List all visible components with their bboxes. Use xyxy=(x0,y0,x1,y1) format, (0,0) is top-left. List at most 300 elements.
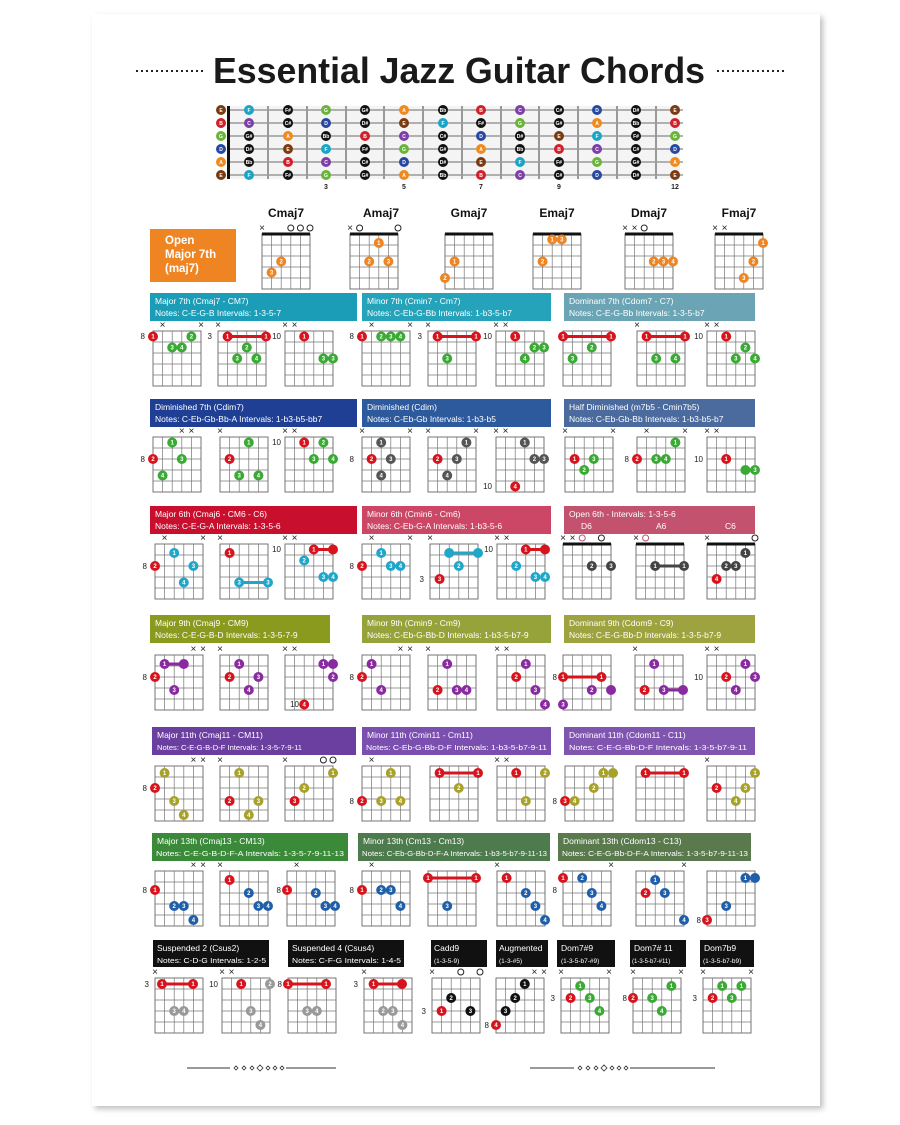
chords row 3: × xyxy=(292,533,298,544)
chords row 4: 1 xyxy=(744,662,748,668)
chords row 5: 1 xyxy=(644,771,648,777)
chords row 5: 1 xyxy=(331,771,335,777)
open maj7 chords: 4 xyxy=(671,260,675,266)
chords row 1: 3 xyxy=(171,346,175,352)
chords row 6: 8 xyxy=(350,886,355,895)
section headers row 7: (1-3-5-9) xyxy=(434,958,459,965)
fretboard note chart: F xyxy=(595,134,599,140)
fretboard note chart: G# xyxy=(362,108,369,114)
chords row 2: 1 xyxy=(465,440,469,446)
chords row 4: 1 xyxy=(446,662,450,668)
fretboard note chart: G xyxy=(673,134,677,140)
chords row 1: 3 xyxy=(236,356,240,362)
chords row 2: 3 xyxy=(389,457,393,463)
chords row 4: 1 xyxy=(163,662,167,668)
chords row 5: 3 xyxy=(380,799,384,805)
chords row 1: 2 xyxy=(245,346,249,352)
chords row 7: 4 xyxy=(401,1023,405,1029)
chords row 6: 8 xyxy=(143,886,148,895)
chords row 4: × xyxy=(714,644,720,655)
chords row 1: 4 xyxy=(523,356,527,362)
chords row 6: × xyxy=(681,860,687,871)
section headers row 7: Dom7#9 xyxy=(561,943,593,953)
section headers row 2 xyxy=(150,399,755,427)
chords row 3: 1 xyxy=(524,548,528,554)
chords row 6: 1 xyxy=(360,888,364,894)
chords row 6: × xyxy=(494,860,500,871)
fretboard note chart: E xyxy=(673,108,677,114)
fretboard note chart: A xyxy=(479,147,483,153)
section headers row 3 xyxy=(150,506,755,534)
open maj7 chords: Cmaj7 xyxy=(268,206,304,220)
fretboard note chart: D xyxy=(595,173,599,179)
fretboard note chart: F xyxy=(441,121,445,127)
chords row 6: 4 xyxy=(682,918,686,924)
section headers row 4: Notes: C-Eb-G-Bb-D Intervals: 1-b3-5-b7-9 xyxy=(367,630,529,640)
chords row 7: 1 xyxy=(286,982,290,988)
chords row 7: 3 xyxy=(422,1007,427,1016)
open maj7 chords: 2 xyxy=(541,260,545,266)
section headers row 4: Minor 9th (Cmin9 - Cm9) xyxy=(367,618,461,628)
chords row 2: 3 xyxy=(455,457,459,463)
chords row 1: 2 xyxy=(533,346,537,352)
fretboard note chart: A xyxy=(286,134,290,140)
open maj7 chords: × xyxy=(622,223,628,234)
fretboard note chart: C xyxy=(595,147,599,153)
chords row 3: 2 xyxy=(153,564,157,570)
fretboard note chart: D xyxy=(479,134,483,140)
chords row 4: × xyxy=(425,644,431,655)
chords row 4: 1 xyxy=(238,662,242,668)
fretboard note chart: D xyxy=(402,160,406,166)
chords row 7: 3 xyxy=(173,1009,177,1015)
chords row 3: × xyxy=(282,533,288,544)
section headers row 6: Major 13th (Cmaj13 - CM13) xyxy=(157,836,265,846)
section headers row 5 xyxy=(152,727,755,755)
chords row 6: 3 xyxy=(725,904,729,910)
chords row 3: 2 xyxy=(457,564,461,570)
chords row 7: 3 xyxy=(306,1009,310,1015)
chords row 7: 2 xyxy=(382,1009,386,1015)
chords row 6: 3 xyxy=(590,891,594,897)
section headers row 3: Open 6th - Intervals: 1-3-5-6 xyxy=(569,509,676,519)
chords row 1: 1 xyxy=(725,334,729,340)
chords row 5: 8 xyxy=(350,797,355,806)
chords row 2: × xyxy=(217,426,223,437)
open maj7 chords: × xyxy=(722,223,728,234)
chords row 7: × xyxy=(558,967,564,978)
section headers row 7: Suspended 2 (Csus2) xyxy=(157,943,239,953)
section headers row 7: Augmented xyxy=(499,943,543,953)
section headers row 4: Notes: C-E-G-B-D Intervals: 1-3-5-7-9 xyxy=(155,630,298,640)
chords row 6: × xyxy=(190,860,196,871)
chords row 7: 2 xyxy=(711,996,715,1002)
chords row 4: 2 xyxy=(436,688,440,694)
chords row 4: 3 xyxy=(561,702,565,708)
open maj7 chords: 1 xyxy=(761,241,765,247)
chords row 4: × xyxy=(632,644,638,655)
chords row 4: 8 xyxy=(350,673,355,682)
fretboard note chart: G xyxy=(518,121,522,127)
chords row 6: × xyxy=(217,860,223,871)
chords row 7: × xyxy=(361,967,367,978)
chords row 1: 3 xyxy=(418,332,423,341)
open maj7 chords: 2 xyxy=(368,260,372,266)
fretboard note chart: G xyxy=(324,173,328,179)
chords row 7: 3 xyxy=(693,994,698,1003)
chords row 1: 1 xyxy=(360,334,364,340)
chords row 3: × xyxy=(217,533,223,544)
chords row 7: 2 xyxy=(631,996,635,1002)
chords row 7: 8 xyxy=(278,980,283,989)
section headers row 5: Notes: C-E-G-Bb-D-F Intervals: 1-3-5-b7-9-11 xyxy=(569,743,747,752)
chords row 2: × xyxy=(188,426,194,437)
chords row 7: 1 xyxy=(160,982,164,988)
fretboard note chart: 7 xyxy=(479,184,483,191)
chords row 7 xyxy=(145,967,754,1033)
fretboard note chart: G# xyxy=(246,134,253,140)
chords row 7: 3 xyxy=(469,1009,473,1015)
fretboard note chart: A xyxy=(595,121,599,127)
fretboard note chart: D xyxy=(324,121,328,127)
chords row 3: 8 xyxy=(350,562,355,571)
fretboard note chart: G xyxy=(219,134,223,140)
chords row 6: 4 xyxy=(192,918,196,924)
chords row 2: 4 xyxy=(257,474,261,480)
chords row 3: 2 xyxy=(725,564,729,570)
chords row 3: 4 xyxy=(715,577,719,583)
chords row 5: 2 xyxy=(153,786,157,792)
chords row 2: 10 xyxy=(694,455,704,464)
section headers row 3: Notes: C-E-G-A Intervals: 1-3-5-6 xyxy=(155,521,281,531)
open maj7 chords: Emaj7 xyxy=(539,206,575,220)
label: Open Major 7th xyxy=(150,229,236,282)
chords row 6: 2 xyxy=(644,891,648,897)
chords row 1: 1 xyxy=(226,334,230,340)
chords row 4: 8 xyxy=(553,673,558,682)
chords row 2: × xyxy=(704,426,710,437)
chords row 6: 4 xyxy=(399,904,403,910)
chords row 4: 4 xyxy=(380,688,384,694)
chords row 1: 4 xyxy=(399,334,403,340)
chords row 2: 3 xyxy=(655,457,659,463)
chords row 4: 2 xyxy=(331,675,335,681)
chords row 4: 3 xyxy=(257,675,261,681)
chords row 7: × xyxy=(429,967,435,978)
open maj7 chords: 2 xyxy=(652,260,656,266)
chords row 2: 3 xyxy=(312,457,316,463)
chords row 4: 3 xyxy=(753,675,757,681)
chords row 4: × xyxy=(704,644,710,655)
section headers row 7: (1-3-5-b7-b9) xyxy=(703,958,741,965)
chords row 2 xyxy=(141,426,760,492)
open maj7 chords: 3 xyxy=(560,238,564,244)
chords row 2: 8 xyxy=(350,455,355,464)
chords row 4: 4 xyxy=(303,702,307,708)
chords row 5: 2 xyxy=(543,771,547,777)
chords row 4: × xyxy=(217,644,223,655)
fretboard note chart: F# xyxy=(478,121,484,127)
chords row 5: 2 xyxy=(715,786,719,792)
chords row 3: 3 xyxy=(609,564,613,570)
open maj7 chords: × xyxy=(259,223,265,234)
open maj7 chords: 1 xyxy=(453,260,457,266)
fretboard note chart: F xyxy=(247,108,251,114)
chords row 6: 4 xyxy=(333,904,337,910)
chords row 2: 1 xyxy=(303,440,307,446)
chords row 4: 1 xyxy=(524,662,528,668)
section headers row 7: Notes: C-D-G Intervals: 1-2-5 xyxy=(157,956,266,965)
fretboard note chart: D# xyxy=(633,173,639,179)
section headers row 1: Major 7th (Cmaj7 - CM7) xyxy=(155,296,249,306)
fretboard note chart: 9 xyxy=(557,184,561,191)
chords row 4: 4 xyxy=(465,688,469,694)
open maj7 chords: × xyxy=(347,223,353,234)
chords row 6: 3 xyxy=(257,904,261,910)
chords row 6: 2 xyxy=(247,891,251,897)
fretboard note chart: B xyxy=(479,108,483,114)
fretboard note chart: F# xyxy=(362,147,368,153)
chords row 1: × xyxy=(407,320,413,331)
section headers row 4: Major 9th (Cmaj9 - CM9) xyxy=(155,618,249,628)
chords row 1: 3 xyxy=(571,356,575,362)
open maj7 chords: 2 xyxy=(443,276,447,282)
section headers row 2: Notes: C-Eb-Gb-Bb-A Intervals: 1-b3-b5-bb7 xyxy=(155,414,323,424)
chords row 4: 1 xyxy=(600,675,604,681)
chords row 7: × xyxy=(606,967,612,978)
fretboard note chart: F# xyxy=(285,108,291,114)
section headers row 7: (1-3-5-b7-#9) xyxy=(561,958,599,965)
chords row 3: 3 xyxy=(420,575,425,584)
chords row 4: 3 xyxy=(534,688,538,694)
section headers row 2: Half Diminished (m7b5 - Cmin7b5) xyxy=(569,402,700,412)
chords row 1: 2 xyxy=(190,334,194,340)
fretboard note chart: D xyxy=(219,147,223,153)
section headers row 3: Minor 6th (Cmin6 - Cm6) xyxy=(367,509,461,519)
chords row 4: 1 xyxy=(322,662,326,668)
chords row 3: 8 xyxy=(143,562,148,571)
chords row 6: 1 xyxy=(228,878,232,884)
section headers row 7: Dom7# 11 xyxy=(634,943,673,953)
section headers row 1: Notes: C-E-G-Bb Intervals: 1-3-5-b7 xyxy=(569,308,705,318)
section headers row 5: Major 11th (Cmaj11 - CM11) xyxy=(157,730,263,740)
chords row 2: × xyxy=(359,426,365,437)
chords row 3: 1 xyxy=(654,564,658,570)
section headers row 4 xyxy=(150,615,755,643)
chords row 3: × xyxy=(494,533,500,544)
chords row 4: × xyxy=(190,644,196,655)
chords row 2: × xyxy=(644,426,650,437)
chords row 2: × xyxy=(714,426,720,437)
chords row 7: 10 xyxy=(209,980,219,989)
chords row 6: 1 xyxy=(474,876,478,882)
fretboard note chart: F xyxy=(518,160,522,166)
chords row 2: × xyxy=(503,426,509,437)
chords row 1: 1 xyxy=(609,334,613,340)
chords row 5: 3 xyxy=(257,799,261,805)
fretboard note chart: Bb xyxy=(440,108,446,114)
chords row 2: × xyxy=(179,426,185,437)
chords row 6: 3 xyxy=(663,891,667,897)
chords row 3: 3 xyxy=(438,577,442,583)
open maj7 chords: 3 xyxy=(662,260,666,266)
chords row 7: 4 xyxy=(660,1009,664,1015)
fretboard note chart: B xyxy=(557,147,561,153)
chords row 5: 4 xyxy=(573,799,577,805)
chords row 2: 3 xyxy=(542,457,546,463)
chords row 7: 4 xyxy=(182,1009,186,1015)
fretboard note chart: Bb xyxy=(633,121,639,127)
chords row 6: 4 xyxy=(600,904,604,910)
chords row 1: 10 xyxy=(694,332,704,341)
chords row 4: × xyxy=(292,644,298,655)
fretboard note chart: Bb xyxy=(323,134,329,140)
chords row 5: × xyxy=(282,755,288,766)
chords row 1: 10 xyxy=(483,332,493,341)
chords row 6: 1 xyxy=(153,888,157,894)
chords row 5: × xyxy=(369,755,375,766)
chords row 2: × xyxy=(407,426,413,437)
chords row 2: 3 xyxy=(180,457,184,463)
chords row 7: × xyxy=(630,967,636,978)
chords row 4: 2 xyxy=(228,675,232,681)
chords row 3: × xyxy=(427,533,433,544)
chords row 1: × xyxy=(215,320,221,331)
chords row 3: 2 xyxy=(360,564,364,570)
chords row 3: 1 xyxy=(173,551,177,557)
chords row 2: × xyxy=(282,426,288,437)
chords row 2: 2 xyxy=(151,457,155,463)
fretboard note chart: G xyxy=(324,108,328,114)
chords row 7: 4 xyxy=(259,1023,263,1029)
chords row 4: × xyxy=(200,644,206,655)
fretboard note chart: E xyxy=(402,121,406,127)
section headers row 3: D6 xyxy=(581,521,592,531)
chords row 7: 1 xyxy=(740,984,744,990)
section headers row 3: Notes: C-Eb-G-A Intervals: 1-b3-5-6 xyxy=(367,521,502,531)
chords row 6: 1 xyxy=(744,876,748,882)
chords row 1: × xyxy=(292,320,298,331)
chords row 1: × xyxy=(634,320,640,331)
chords row 1: 8 xyxy=(350,332,355,341)
chords row 7: 8 xyxy=(485,1021,490,1030)
chords row 3: 10 xyxy=(272,545,282,554)
chords row 7: 3 xyxy=(391,1009,395,1015)
chords row 4: 2 xyxy=(725,675,729,681)
chords row 1: × xyxy=(369,320,375,331)
chords row 5: 1 xyxy=(753,771,757,777)
chords row 1: × xyxy=(198,320,204,331)
section headers row 5: Minor 11th (Cmin11 - Cm11) xyxy=(367,730,473,740)
chords row 7: 1 xyxy=(372,982,376,988)
section headers row 2: Diminished 7th (Cdim7) xyxy=(155,402,244,412)
chords row 7: × xyxy=(541,967,547,978)
chords row 3: 4 xyxy=(543,575,547,581)
chords row 5: 2 xyxy=(592,786,596,792)
chords row 4: 10 xyxy=(694,673,704,682)
section headers row 6: Notes: C-Eb-G-Bb-D-F-A Intervals: 1-b3-5-b7-9-11-13 xyxy=(362,849,547,858)
fretboard note chart: B xyxy=(479,173,483,179)
chords row 4: 8 xyxy=(143,673,148,682)
fretboard note chart: A xyxy=(402,173,406,179)
chords row 3: × xyxy=(560,533,566,544)
chords row 2: 2 xyxy=(228,457,232,463)
section headers row 7: (1-3-5-b7-#11) xyxy=(632,959,670,965)
open maj7 chords: Fmaj7 xyxy=(722,206,757,220)
fretboard note chart: C xyxy=(518,173,522,179)
chords row 1: 1 xyxy=(303,334,307,340)
chords row 1: 4 xyxy=(753,356,757,362)
chords row 6 xyxy=(143,860,760,926)
chords row 2: 1 xyxy=(171,440,175,446)
open maj7 chords: 3 xyxy=(270,270,274,276)
chords row 4: 1 xyxy=(653,662,657,668)
chords row 2: 2 xyxy=(533,457,537,463)
chords row 3: 3 xyxy=(238,580,242,586)
fretboard note chart: A xyxy=(219,160,223,166)
chords row 2: × xyxy=(493,426,499,437)
fretboard note chart: F# xyxy=(285,173,291,179)
chords row 3: 2 xyxy=(515,564,519,570)
chords row 2: 2 xyxy=(370,457,374,463)
title: Essential Jazz Guitar Chords xyxy=(213,50,705,91)
chords row 6: 3 xyxy=(705,918,709,924)
section headers row 7 xyxy=(153,940,754,967)
fretboard note chart xyxy=(216,105,683,191)
chords row 7: 1 xyxy=(191,982,195,988)
chords row 5: 8 xyxy=(143,784,148,793)
chords row 1: 1 xyxy=(151,334,155,340)
section headers row 6: Minor 13th (Cm13 - Cm13) xyxy=(363,836,464,846)
chords row 5: 1 xyxy=(389,771,393,777)
chords row 2: × xyxy=(562,426,568,437)
chords row 1: 3 xyxy=(446,356,450,362)
chords row 4: × xyxy=(282,644,288,655)
chords row 4: 2 xyxy=(153,675,157,681)
fretboard note chart: 12 xyxy=(671,184,679,191)
section headers row 6: Notes: C-E-G-Bb-D-F-A Intervals: 1-3-5-b7-9-11-13 xyxy=(562,849,748,858)
chords row 3: × xyxy=(200,533,206,544)
chords row 2: × xyxy=(292,426,298,437)
chords row 5: 3 xyxy=(744,786,748,792)
chords row 4: × xyxy=(397,644,403,655)
chords row 7: 4 xyxy=(315,1009,319,1015)
chords row 7: 3 xyxy=(651,996,655,1002)
chords row 4: 2 xyxy=(360,675,364,681)
chords row 7: 3 xyxy=(504,1009,508,1015)
chords row 1: 3 xyxy=(322,356,326,362)
open maj7 chords xyxy=(259,206,768,289)
chords row 4: 1 xyxy=(561,675,565,681)
chords row 7: 1 xyxy=(670,984,674,990)
fretboard note chart: C# xyxy=(440,134,446,140)
chords row 4: 2 xyxy=(643,688,647,694)
chords row 7: 1 xyxy=(721,984,725,990)
chords row 6: 2 xyxy=(581,876,585,882)
chords row 7: 3 xyxy=(588,996,592,1002)
fretboard note chart: C# xyxy=(633,147,639,153)
fretboard note chart: E xyxy=(286,147,290,153)
chords row 7: 1 xyxy=(324,982,328,988)
open maj7 chords: Amaj7 xyxy=(363,206,399,220)
chords row 3: 1 xyxy=(312,548,316,554)
chords row 3: 1 xyxy=(228,551,232,557)
chords row 7: 2 xyxy=(514,996,518,1002)
chords row 1: 8 xyxy=(141,332,146,341)
chords row 4: 2 xyxy=(515,675,519,681)
section headers row 5: Dominant 11th (Cdom11 - C11) xyxy=(569,730,686,740)
chords row 6: 4 xyxy=(543,918,547,924)
